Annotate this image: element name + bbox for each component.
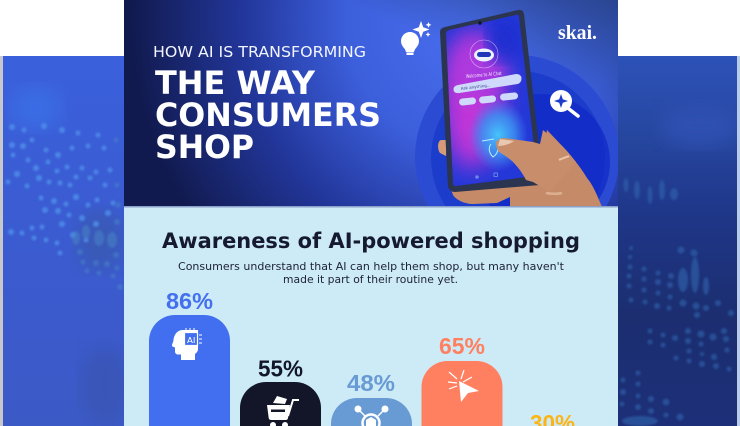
heading: the way consumers shop: SHOP <box>155 128 254 166</box>
text: section description <box>178 260 565 286</box>
phone screen <box>446 14 534 186</box>
icon: connected cube <box>354 406 388 426</box>
logo: skai: skai. <box>558 22 597 44</box>
panel: left background image <box>0 56 129 426</box>
bar chart: awareness percentages <box>149 288 575 426</box>
heading: the way consumers shop <box>155 70 379 158</box>
search box <box>454 74 522 93</box>
thumb and hand front <box>496 130 576 186</box>
fingers behind phone <box>438 140 447 156</box>
panel: header banner <box>124 0 618 206</box>
icon: magnifier with sparkle <box>550 90 578 116</box>
heading: awareness of AI-powered shopping: Awareness of AI-powered shopping <box>162 229 580 254</box>
bar: 86% <box>149 288 230 426</box>
chat bot badge <box>470 40 498 68</box>
bar: 55% <box>240 356 321 426</box>
icon: AI head: AI <box>187 336 196 345</box>
chip buttons <box>459 92 518 106</box>
bar: 65% <box>422 333 502 426</box>
heading: the way consumers shop: THE WAY <box>155 64 316 102</box>
welcome label: Welcome to AI Chat <box>466 71 502 80</box>
bar: 65%: 65% <box>439 333 485 359</box>
panel: right background image <box>618 56 740 426</box>
bar: 55%: 55% <box>258 356 303 382</box>
text: section description: made it part of their routine yet. <box>283 273 458 286</box>
illustration: hand holding phone <box>438 10 602 207</box>
bar: 48%: 48% <box>347 370 395 396</box>
phone body <box>440 10 543 192</box>
heading: the way consumers shop: CONSUMERS <box>155 96 381 134</box>
camera and status <box>478 21 482 25</box>
heading: how AI is transforming: HOW AI IS TRANSFORMING <box>153 43 366 61</box>
icon: click cursor <box>448 370 479 402</box>
search box: Ask anything... <box>461 82 491 91</box>
text: section description: Consumers understand that AI can help them shop, but many haven't <box>178 260 565 273</box>
icon: background circles <box>415 56 618 206</box>
bar: 86%: 86% <box>166 288 213 314</box>
bar: 48% <box>331 370 412 426</box>
icon: shopping cart <box>267 396 299 426</box>
icon: light bulb with sparkle <box>401 21 431 55</box>
panel: awareness section <box>124 206 618 426</box>
